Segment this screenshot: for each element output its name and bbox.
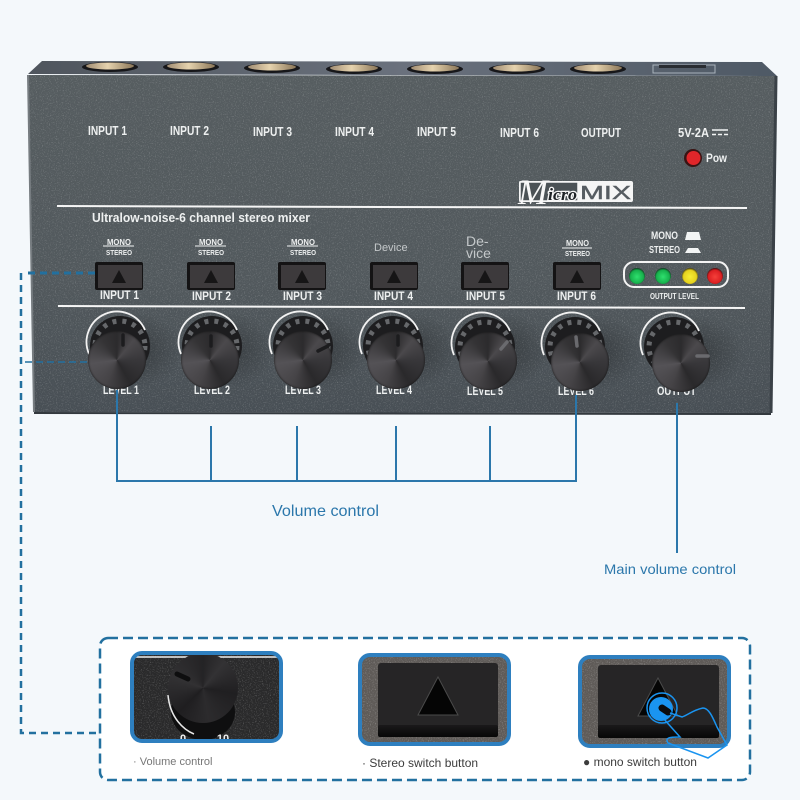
mono/stereo caption row: STEREO	[565, 249, 590, 258]
logo: Micro MIX: icro	[548, 185, 577, 204]
port labels: INPUT 1	[88, 124, 127, 138]
subtitle: Ultralow-noise-6 channel stereo mixer	[92, 211, 310, 225]
card: volume control knob	[130, 650, 283, 745]
mono stereo legend: MONO	[651, 230, 678, 242]
icon: tapping hand	[647, 693, 727, 758]
mono/stereo caption row: De-	[466, 233, 489, 249]
dashed connector from switch and knob to detail panel	[21, 273, 100, 733]
label: main volume control: Main volume control	[604, 561, 736, 577]
logo: Micro MIX: M	[517, 172, 550, 212]
caption: volume control: · Volume control	[133, 756, 212, 768]
port labels: OUTPUT	[581, 126, 621, 140]
card: volume control knob: 0	[180, 733, 186, 745]
divider upper	[57, 206, 747, 208]
mono/stereo caption row: STEREO	[290, 248, 316, 257]
switch labels	[100, 288, 596, 303]
connector: channel volume bracket	[117, 390, 576, 481]
switch labels: INPUT 1	[100, 288, 139, 302]
logo: Micro MIX: MIX	[580, 183, 631, 203]
mono/stereo caption row: vice	[466, 245, 491, 261]
caption: mono switch button: ● mono switch button	[583, 755, 697, 769]
top jacks	[82, 62, 715, 74]
port labels: INPUT 4	[335, 125, 374, 139]
mono/stereo caption row: MONO	[566, 238, 589, 248]
switch labels: INPUT 5	[466, 289, 505, 303]
level labels: LEVEL 3	[285, 383, 321, 397]
power LED	[684, 149, 728, 167]
mono/stereo caption row: MONO	[199, 237, 223, 247]
level labels: LEVEL 1	[103, 383, 139, 397]
level labels: LEVEL 4	[376, 383, 412, 397]
level labels: LEVEL 6	[558, 384, 594, 398]
mono stereo legend	[649, 230, 701, 256]
knobs	[87, 312, 744, 392]
divider lower	[58, 306, 745, 308]
port labels: 5V-2A	[678, 126, 709, 140]
switch labels: INPUT 4	[374, 289, 413, 303]
mixer device	[28, 61, 777, 414]
caption: stereo switch button: · Stereo switch button	[362, 756, 478, 770]
label: volume control: Volume control	[272, 503, 379, 520]
level labels: LEVEL 5	[467, 384, 503, 398]
port labels: INPUT 3	[253, 125, 292, 139]
level labels	[103, 383, 697, 398]
detail panel	[100, 638, 750, 780]
level labels: OUTPUT	[657, 384, 697, 398]
switch buttons	[95, 262, 601, 290]
card: mono switch button	[578, 655, 731, 748]
mono stereo legend: STEREO	[649, 244, 680, 256]
device top edge	[28, 61, 777, 76]
logo: Micro MIX	[517, 172, 633, 212]
switch labels: INPUT 6	[557, 289, 596, 303]
mono/stereo caption row: STEREO	[106, 248, 132, 257]
device front face	[28, 75, 776, 413]
mono/stereo caption row: MONO	[291, 237, 315, 247]
output level LEDs	[624, 262, 728, 301]
level labels: LEVEL 2	[194, 383, 230, 397]
switch labels: INPUT 2	[192, 289, 231, 303]
output level LEDs: OUTPUT LEVEL	[650, 292, 699, 301]
port labels: INPUT 5	[417, 125, 456, 139]
mono/stereo caption row	[103, 233, 592, 261]
mono/stereo caption row: MONO	[107, 237, 131, 247]
card: volume control knob: 10	[217, 733, 229, 745]
power LED: Pow	[706, 151, 728, 165]
switch labels: INPUT 3	[283, 289, 322, 303]
mono/stereo caption row: STEREO	[198, 248, 224, 257]
port labels	[88, 124, 728, 140]
connector: main volume line	[676, 403, 678, 553]
port labels: INPUT 2	[170, 124, 209, 138]
port labels: INPUT 6	[500, 126, 539, 140]
mono/stereo caption row: Device	[374, 242, 408, 254]
card: stereo switch button	[358, 653, 511, 746]
panel dashed frame	[100, 638, 750, 780]
